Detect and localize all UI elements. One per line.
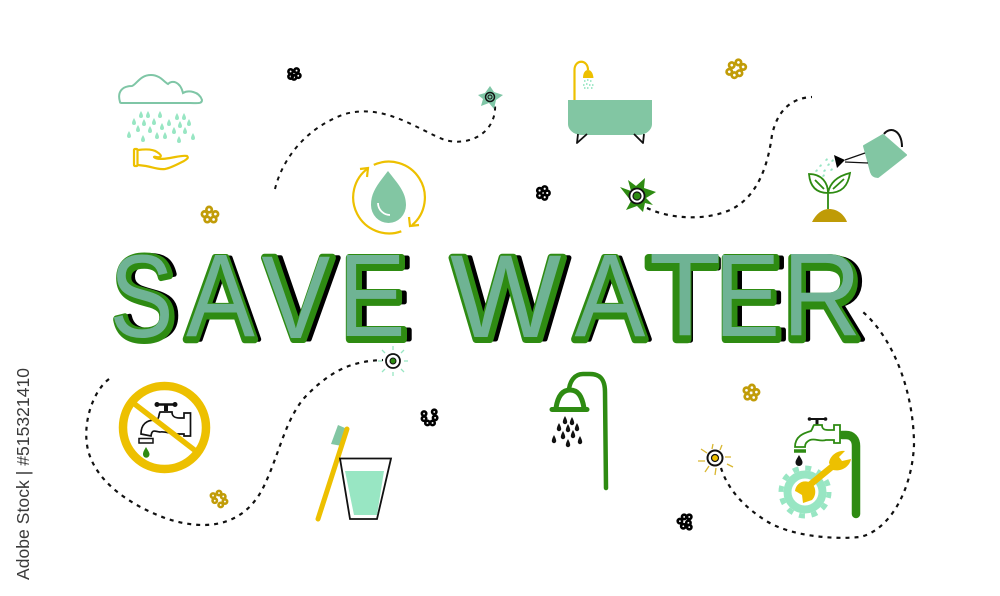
icon: yellow sun target bbox=[698, 444, 733, 475]
title: SAVE WATER: W bbox=[458, 233, 569, 365]
icon: plant sprout bbox=[809, 173, 850, 222]
flower: gold bottom left bbox=[211, 491, 227, 507]
stock credit: Adobe Stock | #515321410 bbox=[13, 368, 33, 580]
title: SAVE WATER: S bbox=[110, 230, 173, 362]
flower: gold top right bbox=[723, 57, 749, 81]
title: SAVE WATER: A bbox=[186, 231, 255, 362]
title: SAVE WATER: V bbox=[261, 233, 330, 364]
title: SAVE WATER: A bbox=[574, 229, 645, 361]
title: SAVE WATER: A bbox=[186, 234, 255, 365]
title: SAVE WATER: R bbox=[783, 233, 862, 365]
title: SAVE WATER: T bbox=[649, 229, 721, 361]
title: SAVE WATER: E bbox=[338, 230, 405, 362]
flower: gold lower right bbox=[744, 385, 759, 400]
title: SAVE WATER: E bbox=[717, 232, 782, 364]
title: SAVE WATER: R bbox=[789, 233, 868, 365]
title: SAVE WATER: A bbox=[579, 232, 650, 364]
icon: green star target bbox=[620, 178, 656, 212]
dashed path: bottom right bbox=[721, 312, 914, 538]
icon: rain drops bbox=[127, 111, 195, 143]
title: SAVE WATER: S bbox=[112, 232, 176, 364]
flower: black lower centre bbox=[422, 410, 437, 425]
icon: recycle water drop bbox=[353, 162, 425, 233]
icon: green sun target bbox=[378, 346, 408, 376]
dashed path: top right bbox=[647, 97, 812, 217]
icon: watering can bbox=[815, 130, 906, 177]
icon: toothbrush bbox=[318, 425, 347, 519]
title: SAVE WATER: A bbox=[190, 234, 259, 365]
title: SAVE WATER: R bbox=[782, 229, 861, 361]
icon: rain cloud bbox=[119, 75, 202, 103]
flower: black centre bbox=[537, 186, 550, 200]
dashed path: top left bbox=[275, 104, 495, 189]
title: SAVE WATER: S bbox=[117, 231, 181, 363]
flower: gold left bbox=[202, 207, 218, 222]
icon: shower bbox=[552, 374, 606, 488]
icon: green tap and pipe bbox=[794, 417, 856, 514]
icon: wrench bbox=[795, 451, 851, 503]
title: SAVE WATER: W bbox=[450, 231, 561, 363]
title: SAVE WATER: V bbox=[264, 234, 333, 365]
icon: teal star target bbox=[478, 86, 503, 109]
title: SAVE WATER: T bbox=[649, 234, 721, 366]
icon: gear bbox=[781, 468, 829, 516]
title: SAVE WATER: E bbox=[723, 232, 788, 364]
flower: black bottom bbox=[678, 515, 691, 529]
title: SAVE WATER: T bbox=[646, 233, 718, 365]
icon: open hand bbox=[134, 149, 188, 169]
icon: bathtub bbox=[568, 62, 652, 143]
icon: no running tap bbox=[123, 386, 206, 469]
title: SAVE WATER: W bbox=[452, 233, 563, 365]
title: SAVE WATER: E bbox=[347, 233, 414, 365]
dashed path: bottom left bbox=[86, 360, 383, 525]
title: SAVE WATER: E bbox=[341, 233, 408, 365]
icon: glass of water bbox=[340, 458, 391, 519]
title: SAVE WATER: V bbox=[270, 234, 339, 365]
title: SAVE WATER: E bbox=[715, 229, 780, 361]
title: SAVE WATER bbox=[110, 229, 868, 366]
title: SAVE WATER: A bbox=[574, 232, 645, 364]
flower: black top left bbox=[288, 68, 300, 80]
